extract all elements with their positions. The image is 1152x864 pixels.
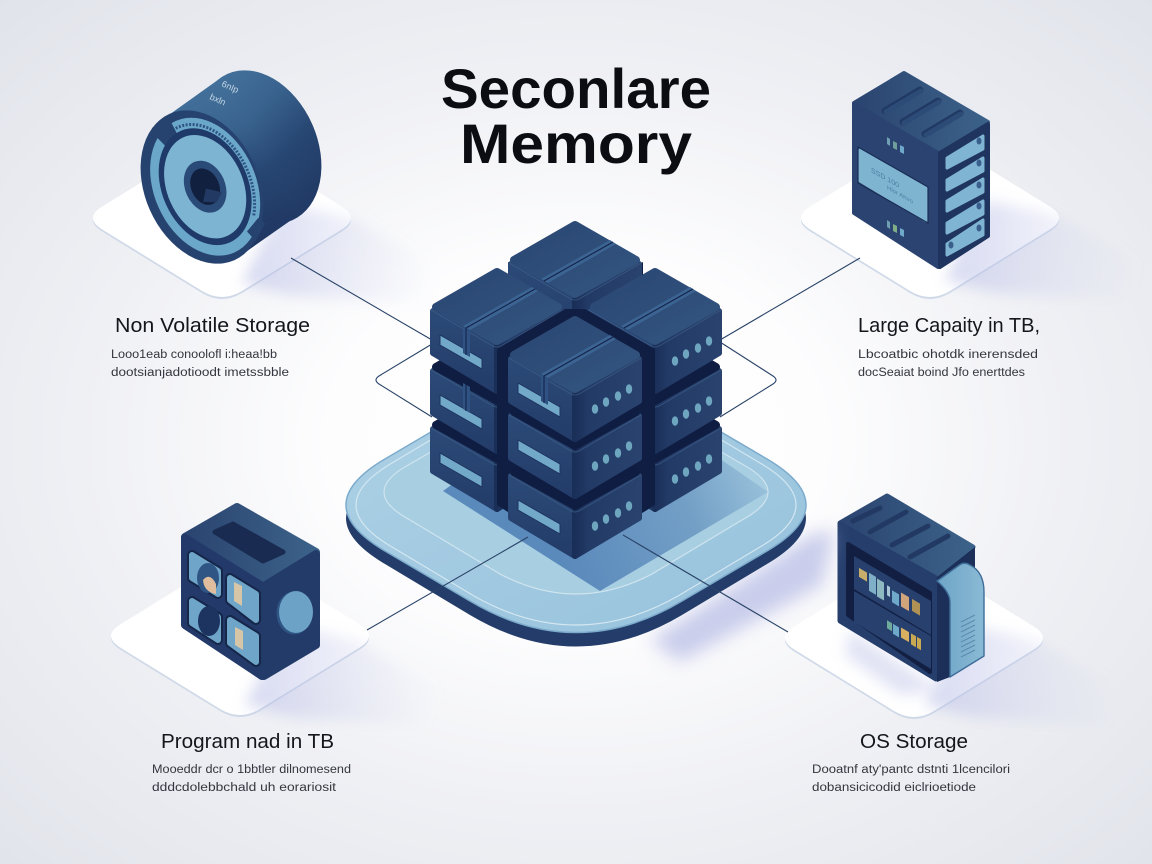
heading: os storage: OS Storage	[860, 731, 968, 753]
card: program	[111, 557, 440, 725]
title: Seconlare	[441, 57, 711, 120]
description: program: dddcdolebbchald uh eorariosit	[152, 782, 337, 794]
platform base	[346, 389, 806, 646]
heading: large capacity: Large Capaity in TB,	[858, 315, 1040, 337]
description: os storage: dobansicicodid eiclrioetiode	[812, 782, 976, 794]
panel: large capacity	[801, 73, 1140, 379]
card: non volatile storage	[93, 139, 437, 303]
description: non volatile storage: dootsianjadotioodt imetssbble	[111, 367, 289, 379]
right column	[589, 272, 721, 509]
description: program: Mooeddr dcr o 1bbtler dilnomesend	[152, 764, 351, 776]
panel: os storage	[785, 496, 1120, 794]
central storage block stack	[431, 225, 721, 556]
panel: non volatile storage	[93, 51, 437, 379]
icon: cube module	[185, 507, 316, 676]
description: large capacity: Lbcoatbic ohotdk inerensded	[858, 349, 1038, 361]
block shadow on platform	[443, 445, 768, 591]
description: large capacity	[858, 349, 1038, 379]
description: os storage	[812, 764, 1010, 794]
icon: disk cylinder: 6nIp	[220, 79, 240, 95]
back block	[508, 225, 643, 420]
connector lines	[291, 258, 860, 632]
icon: server tower: SSD 100	[871, 166, 899, 190]
icon: disk cylinder: bxln	[208, 92, 227, 108]
description: os storage: Dooatnf aty'pantc dstnti 1lcencilori	[812, 764, 1010, 776]
platform inner tray	[384, 392, 768, 594]
front column	[509, 320, 641, 556]
icon: server tower	[854, 73, 988, 267]
title	[441, 57, 711, 175]
platform	[346, 378, 835, 662]
description: non volatile storage: Looo1eab conoolofl i:heaa!bb	[111, 349, 277, 361]
description: program	[152, 764, 351, 794]
icon: disk cylinder	[117, 51, 345, 283]
card: large capacity	[801, 139, 1140, 300]
description: large capacity: docSeaiat boind Jfo enerttdes	[858, 367, 1025, 379]
heading: non volatile storage: Non Volatile Storage	[115, 315, 310, 337]
platform surface	[346, 378, 806, 632]
title: Memory	[460, 112, 692, 175]
card: os storage	[785, 559, 1120, 725]
heading: program: Program nad in TB	[161, 731, 334, 753]
icon: server tower: Hlor Ahvo	[887, 184, 913, 206]
left column	[431, 272, 563, 509]
description: non volatile storage	[111, 349, 289, 379]
panel: program	[111, 507, 440, 794]
icon: drive rack	[840, 496, 984, 682]
